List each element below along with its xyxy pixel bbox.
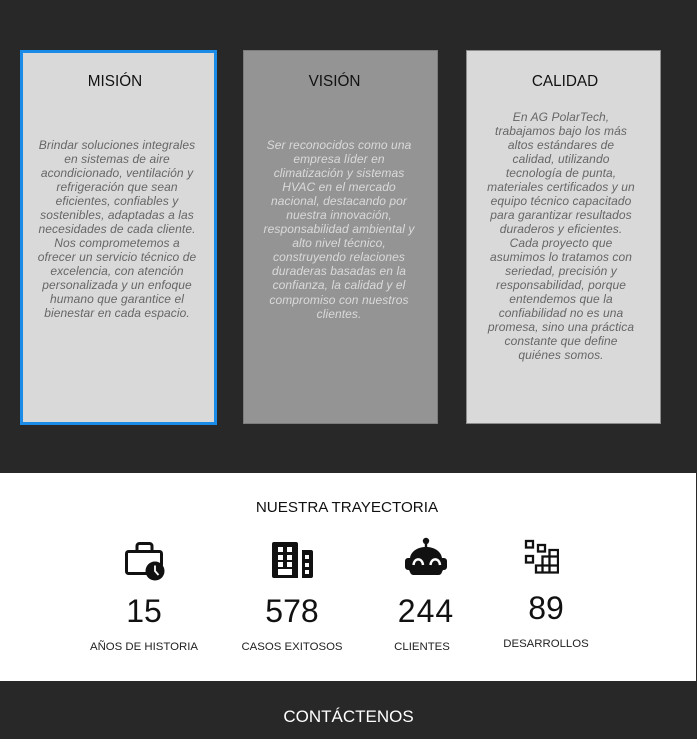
- number: 244: 244: [398, 593, 454, 629]
- text: misión: refrigeración que sean: [56, 180, 178, 194]
- heading: visión: VISIÓN: [309, 73, 360, 90]
- label: años de historia: AÑOS DE HISTORIA: [90, 640, 198, 652]
- text: calidad: Cada proyecto que: [510, 236, 612, 250]
- text: misión: necesidades de cada cliente.: [38, 222, 196, 236]
- text: misión: humano que garantice el: [50, 292, 184, 306]
- text: calidad: promesa, sino una práctica: [488, 320, 634, 334]
- text: calidad: seriedad, precisión y: [505, 264, 617, 278]
- text: visión: alto nivel técnico,: [292, 236, 386, 250]
- label: casos exitosos: CASOS EXITOSOS: [241, 640, 343, 652]
- text: visión: responsabilidad ambiental y: [264, 222, 414, 236]
- text: calidad: duraderos y eficientes.: [500, 222, 622, 236]
- stat: casos exitosos: [241, 542, 343, 652]
- text: misión: acondicionado, ventilación y: [41, 166, 193, 180]
- card: misión: [20, 50, 217, 425]
- label: desarrollos: DESARROLLOS: [503, 638, 589, 650]
- text: calidad: constante que define: [504, 334, 618, 348]
- text: visión: Ser reconocidos como una: [267, 138, 411, 152]
- number: 15: 15: [126, 593, 162, 629]
- text: visión: nuestra innovación,: [286, 208, 392, 222]
- text: visión: compromiso con nuestros: [269, 293, 409, 307]
- text: calidad: equipo técnico capacitado: [491, 194, 631, 208]
- text: calidad: altos estándares de: [508, 138, 614, 152]
- text: misión: sostenibles, adaptadas a las: [40, 208, 194, 222]
- text: misión: Nos comprometemos a: [54, 236, 180, 250]
- text: visión: confianza, la calidad y el: [273, 278, 405, 292]
- card: visión: [243, 50, 438, 424]
- text: calidad: En AG PolarTech,: [513, 110, 609, 124]
- text: calidad: calidad, utilizando: [513, 152, 609, 166]
- text: calidad: tecnología de punta,: [506, 166, 616, 180]
- text: visión: empresa líder en: [293, 152, 385, 166]
- text: misión: en sistemas de aire: [64, 152, 170, 166]
- text: calidad: asumimos lo tratamos con: [490, 250, 632, 264]
- text: calidad: materiales certificados y un: [487, 180, 635, 194]
- text: visión: climatización y sistemas: [274, 166, 404, 180]
- icon: blocks: [524, 540, 559, 574]
- text: calidad: confiabilidad no es una: [499, 306, 623, 320]
- panel: dark top background: [0, 0, 697, 473]
- text: visión: HVAC en el mercado: [282, 180, 396, 194]
- number: 89: 89: [528, 590, 564, 626]
- heading: calidad: CALIDAD: [532, 73, 598, 90]
- heading: misión: MISIÓN: [88, 72, 142, 90]
- icon: buildings: [272, 542, 313, 578]
- text: visión: construyendo relaciones: [273, 250, 405, 264]
- text: misión: eficientes, confiables y: [56, 194, 178, 208]
- icon: robot: [405, 538, 447, 575]
- text: visión: clientes.: [317, 307, 361, 321]
- text: calidad: entendemos que la: [509, 292, 613, 306]
- text: visión: nacional, destacando por: [271, 194, 407, 208]
- text: visión: [264, 138, 415, 321]
- text: contáctenos: CONTÁCTENOS: [283, 707, 414, 726]
- text: misión: excelencia, con atención: [50, 264, 184, 278]
- text: calidad: responsabilidad, porque: [496, 278, 626, 292]
- text: misión: bienestar en cada espacio.: [44, 306, 190, 320]
- icon: briefcase with clock: [125, 542, 164, 580]
- stat: años de historia: [90, 542, 198, 652]
- text: misión: ofrecer un servicio técnico de: [38, 250, 196, 264]
- text: misión: Brindar soluciones integrales: [39, 138, 195, 152]
- stat: desarrollos: [503, 540, 589, 650]
- card: calidad: [466, 50, 661, 424]
- text: misión: personalizada y un enfoque: [42, 278, 192, 292]
- text: calidad: [487, 110, 635, 362]
- text: misión: [38, 138, 196, 320]
- text: visión: duraderas basadas en la: [272, 264, 406, 278]
- panel: nuestra trayectoria: [0, 473, 696, 681]
- text: calidad: quiénes somos.: [518, 348, 604, 362]
- stat: clientes: [394, 538, 454, 652]
- label: clientes: CLIENTES: [394, 640, 450, 652]
- footer: contáctenos: [0, 681, 697, 739]
- number: 578: 578: [265, 593, 319, 629]
- text: calidad: para garantizar resultados: [490, 208, 632, 222]
- text: calidad: trabajamos bajo los más: [495, 124, 627, 138]
- heading: nuestra trayectoria: NUESTRA TRAYECTORIA: [256, 499, 438, 516]
